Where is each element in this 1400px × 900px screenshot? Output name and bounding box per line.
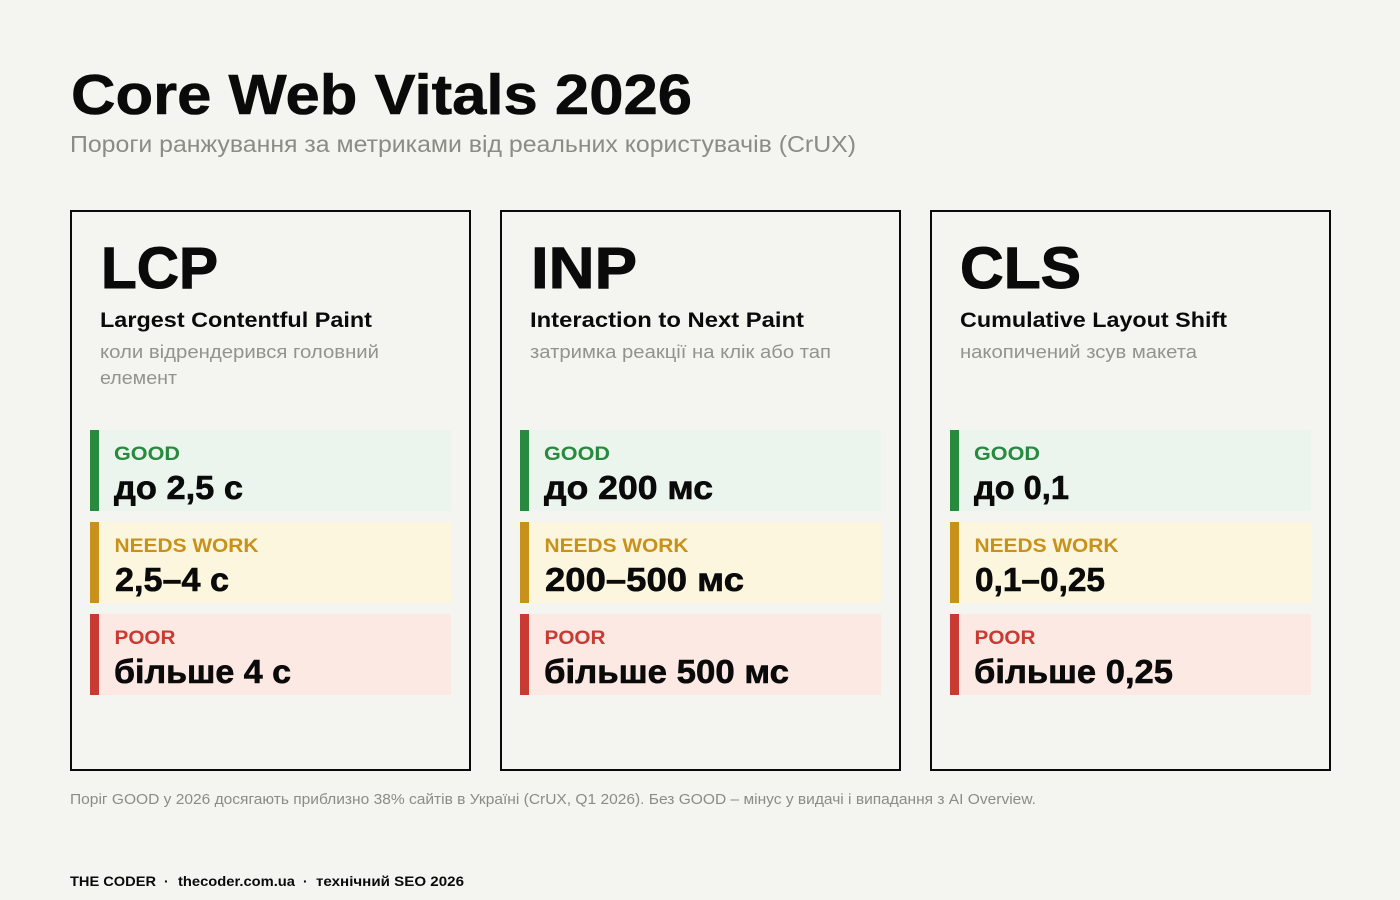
LCP poor threshold: POOR bbox=[114, 627, 176, 649]
LCP good threshold: до 2,5 с bbox=[114, 469, 243, 506]
LCP poor threshold bbox=[90, 614, 451, 695]
footer credits: · bbox=[303, 873, 308, 889]
CLS acronym: CLS bbox=[960, 236, 1081, 301]
LCP needs work threshold: 2,5–4 с bbox=[115, 561, 229, 598]
LCP description: елемент bbox=[100, 368, 177, 388]
CLS good threshold: GOOD bbox=[974, 443, 1040, 465]
footer credits: THE CODER bbox=[70, 873, 156, 889]
LCP poor threshold: більше 4 с bbox=[114, 653, 291, 690]
CLS needs work threshold: 0,1–0,25 bbox=[975, 561, 1105, 598]
footer credits: технічний SEO 2026 bbox=[316, 873, 464, 889]
panel: CLS bbox=[931, 211, 1330, 770]
CLS poor threshold: більше 0,25 bbox=[974, 653, 1173, 690]
panel: LCP bbox=[71, 211, 470, 770]
CLS good threshold: до 0,1 bbox=[974, 469, 1069, 506]
LCP acronym: LCP bbox=[101, 236, 218, 301]
INP good threshold: до 200 мс bbox=[544, 469, 713, 506]
panel: INP bbox=[501, 211, 900, 770]
CLS needs work threshold: NEEDS WORK bbox=[974, 535, 1118, 557]
title: Core Web Vitals 2026 bbox=[71, 63, 692, 127]
footer credits: · bbox=[164, 873, 169, 889]
INP description: затримка реакції на клік або тап bbox=[530, 342, 831, 362]
LCP full name: Largest Contentful Paint bbox=[100, 308, 372, 332]
LCP description: коли відрендерився головний bbox=[100, 342, 379, 362]
CLS poor threshold: POOR bbox=[974, 627, 1036, 649]
CLS needs work threshold bbox=[950, 522, 1311, 603]
subtitle: Пороги ранжування за метриками від реальних користувачів (CrUX) bbox=[70, 131, 856, 157]
INP needs work threshold: NEEDS WORK bbox=[544, 535, 688, 557]
LCP good threshold: GOOD bbox=[114, 443, 180, 465]
footer credits: thecoder.com.ua bbox=[178, 873, 295, 889]
CLS description: накопичений зсув макета bbox=[960, 342, 1198, 362]
LCP description bbox=[100, 342, 379, 388]
INP good threshold bbox=[520, 430, 881, 511]
LCP good threshold bbox=[90, 430, 451, 511]
LCP needs work threshold: NEEDS WORK bbox=[114, 535, 258, 557]
footnote: Поріг GOOD у 2026 досягають приблизно 38% сайтів в Україні (CrUX, Q1 2026). Без GOOD – мінус у видачі і випадання з AI Overview. bbox=[70, 792, 1036, 808]
CLS full name: Cumulative Layout Shift bbox=[960, 308, 1227, 332]
CLS poor threshold bbox=[950, 614, 1311, 695]
CLS good threshold bbox=[950, 430, 1311, 511]
INP poor threshold bbox=[520, 614, 881, 695]
INP acronym: INP bbox=[531, 236, 637, 301]
INP poor threshold: POOR bbox=[544, 627, 606, 649]
INP needs work threshold: 200–500 мс bbox=[545, 561, 744, 598]
INP good threshold: GOOD bbox=[544, 443, 610, 465]
footer credits bbox=[70, 873, 464, 889]
INP needs work threshold bbox=[520, 522, 881, 603]
INP full name: Interaction to Next Paint bbox=[530, 308, 804, 332]
LCP needs work threshold bbox=[90, 522, 451, 603]
INP poor threshold: більше 500 мс bbox=[544, 653, 789, 690]
